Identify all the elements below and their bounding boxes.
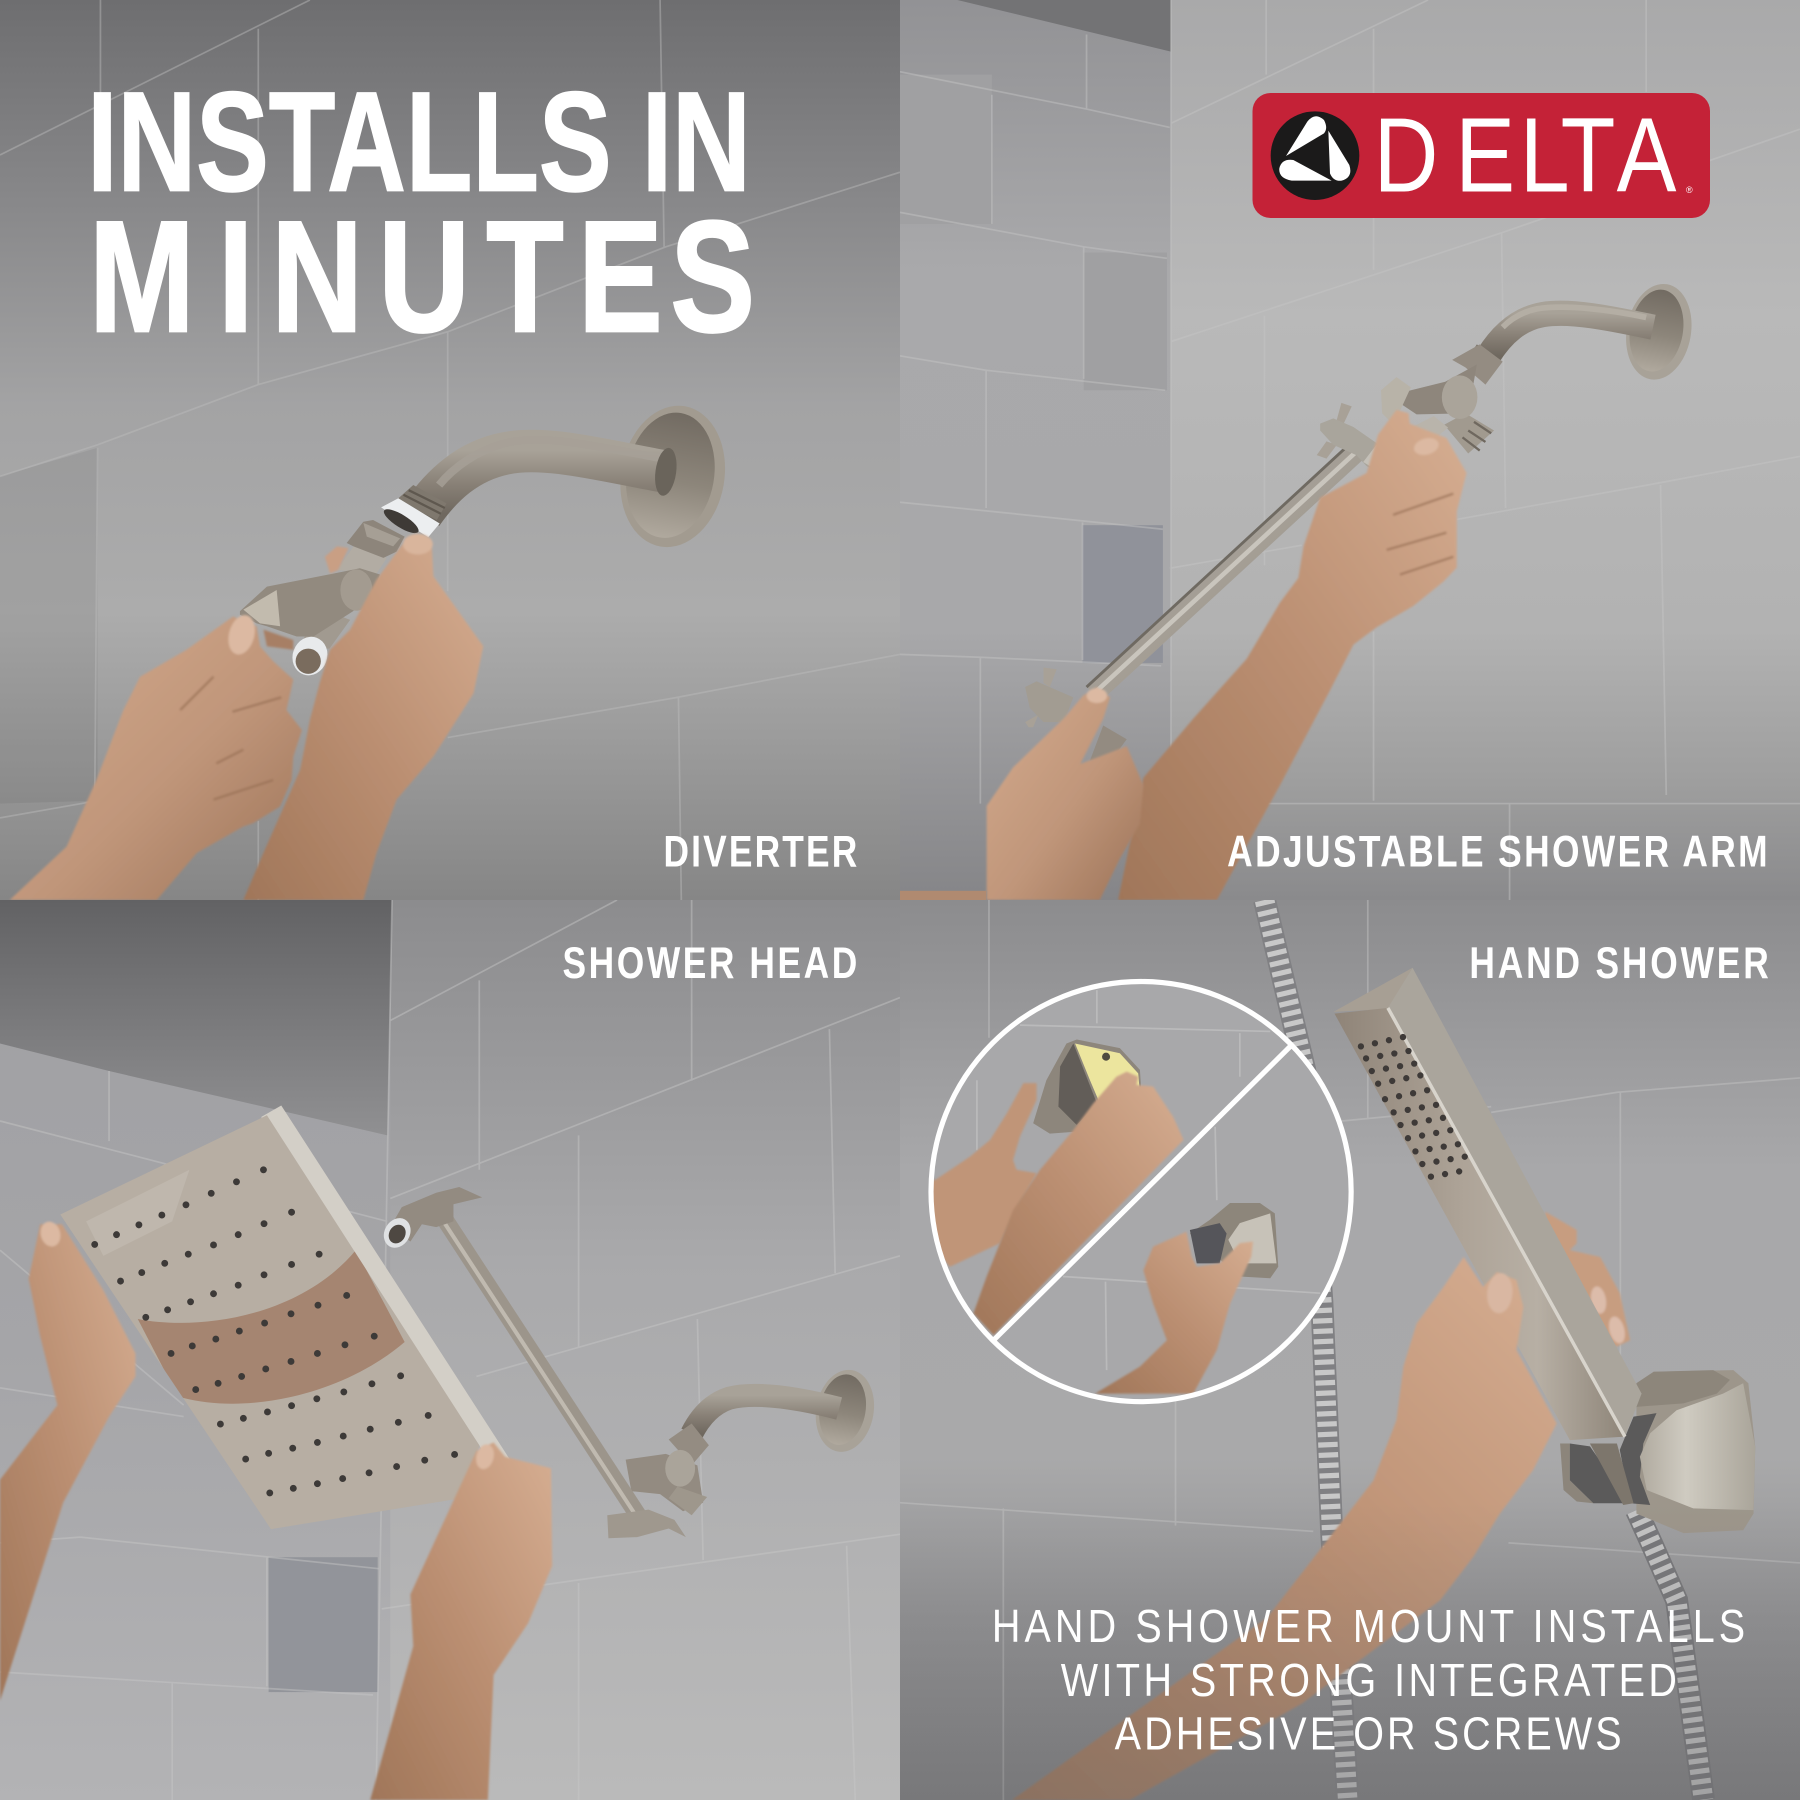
logo: delta — [1252, 93, 1710, 218]
panel: hand shower — [900, 900, 1800, 1800]
label: hand shower: HAND SHOWER — [1469, 939, 1769, 988]
icon: diverter fitting — [240, 520, 405, 680]
icon: fingers behind hand shower — [1545, 1212, 1630, 1347]
icon: raised arm and hand — [1118, 410, 1467, 900]
icon: shower hose — [1264, 900, 1704, 1800]
icon: shower arm, flange and diverter — [1381, 279, 1699, 453]
icon: right hand — [243, 534, 483, 900]
icon: wall mount — [1560, 1370, 1755, 1533]
bottom fade — [900, 1503, 1800, 1800]
icon: lower hand — [987, 687, 1143, 900]
title — [87, 64, 755, 365]
icon: left arm and hand — [0, 1219, 135, 1701]
icon: delta triangle mark — [1271, 111, 1359, 200]
label: adjustable shower arm: ADJUSTABLE SHOWER ARM — [1227, 828, 1768, 877]
inset circle: two mounting methods — [926, 982, 1351, 1402]
panel: shower head — [0, 900, 900, 1800]
icon: hand shower head — [1333, 968, 1642, 1440]
icon: shower arm with flange — [381, 397, 736, 555]
label: shower head: SHOWER HEAD — [562, 939, 857, 988]
icon: right arm and hand — [370, 1442, 552, 1800]
icon: front hand and forearm — [973, 1072, 1184, 1335]
icon: rain shower head plate with spray holes — [60, 1105, 514, 1529]
icon: adjustable rod — [1025, 403, 1410, 761]
icon: hand pressing mount — [1095, 1232, 1253, 1394]
title: MINUTES — [89, 189, 755, 365]
body text: mount installs with adhesive or screws: WITH STRONG INTEGRATED — [1061, 1655, 1677, 1707]
body text: mount installs with adhesive or screws: ADHESIVE OR SCREWS — [1115, 1709, 1622, 1760]
icon: wall mount installed — [1190, 1203, 1278, 1278]
icon: adhesive mount being peeled — [1033, 1039, 1142, 1140]
panel: diverter — [0, 0, 900, 900]
icon: arm and hand holding shower — [1012, 1257, 1557, 1800]
icon: left hand — [10, 612, 302, 900]
body text: mount installs with adhesive or screws — [992, 1601, 1745, 1760]
label: diverter: DIVERTER — [664, 828, 857, 877]
wordmark: DELTA — [1374, 96, 1677, 214]
icon: back hand holding mount — [926, 1083, 1037, 1267]
registered mark: ® — [1686, 185, 1693, 195]
body text: mount installs with adhesive or screws: HAND SHOWER MOUNT INSTALLS — [992, 1601, 1745, 1653]
panel: adjustable shower arm — [900, 0, 1800, 900]
icon: adjustable rod with fittings — [379, 1187, 880, 1538]
